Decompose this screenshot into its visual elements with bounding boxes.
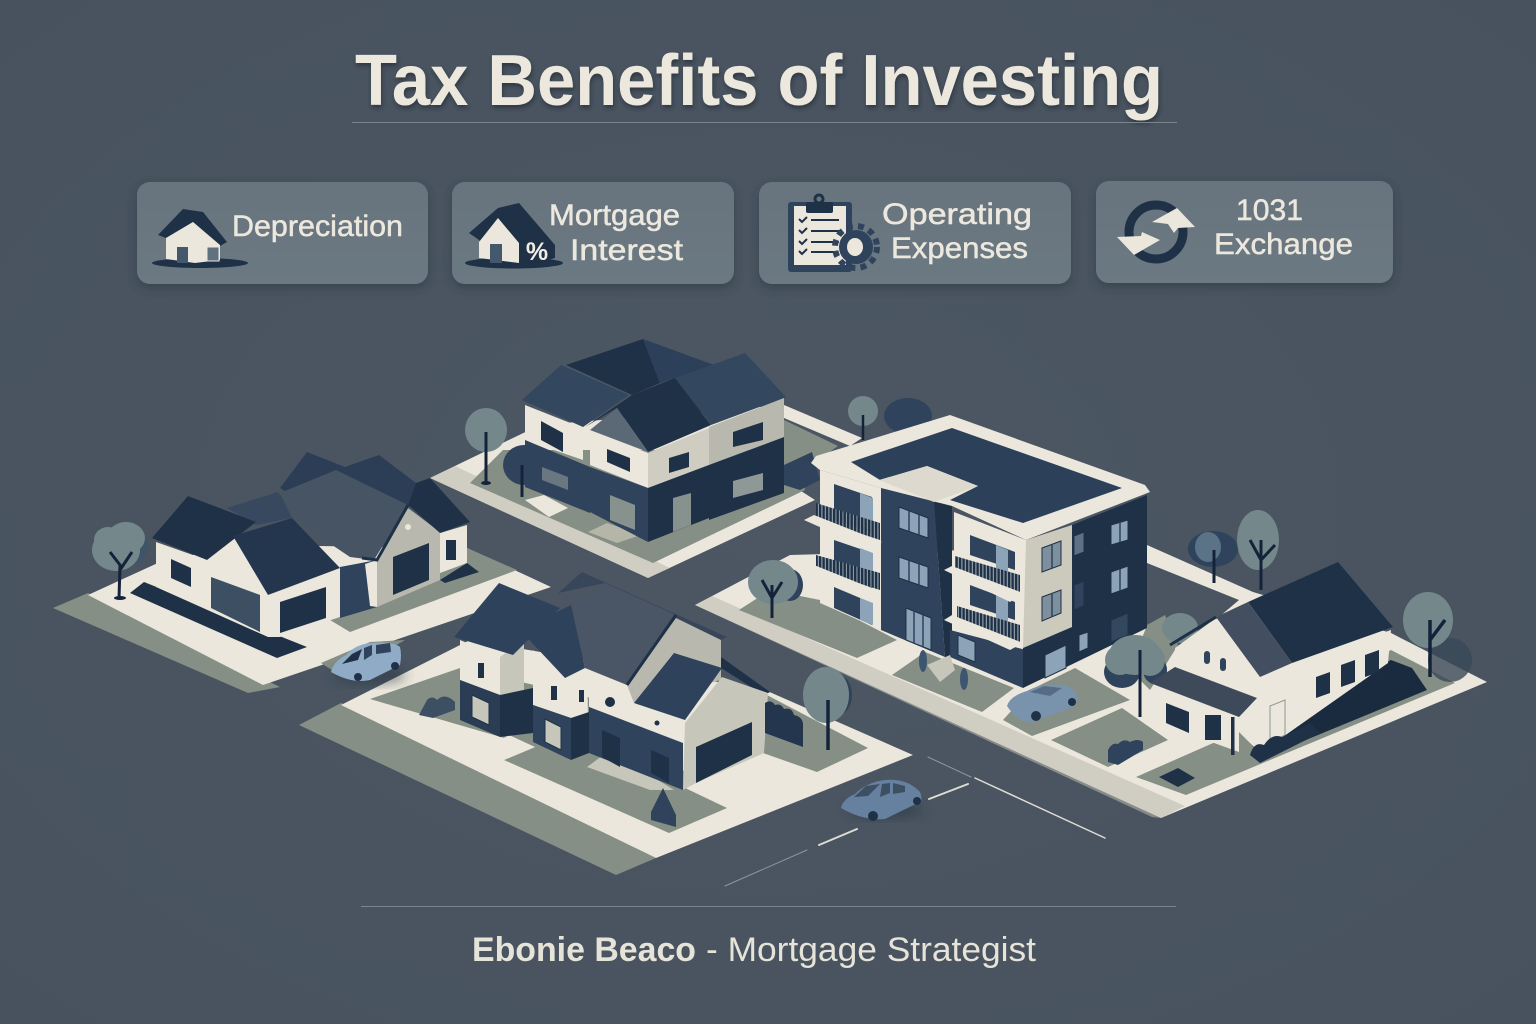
- footer credit: [472, 931, 1037, 969]
- tree: left of apartment: [748, 560, 803, 618]
- entry steps: [927, 655, 955, 682]
- house: left: [152, 452, 479, 637]
- icon: exchange arrows: [1117, 205, 1195, 259]
- roof: porch: [1150, 667, 1257, 717]
- roof: main slope: [1248, 562, 1393, 663]
- wall: garage front: [268, 572, 340, 637]
- label: Operating Expenses: Operating: [882, 198, 1032, 231]
- lot: right with apartment: [695, 545, 1487, 818]
- car: apartment driveway: [1007, 685, 1078, 722]
- house: top middle: [522, 339, 786, 542]
- label: Mortgage Interest: Interest: [570, 234, 684, 267]
- tree: far right: [1403, 592, 1472, 682]
- label: Mortgage Interest: [549, 199, 684, 267]
- windows: [899, 507, 1128, 678]
- tree: left: [92, 522, 148, 600]
- panel: mortgage interest: [452, 182, 734, 284]
- roof: [811, 415, 1150, 540]
- label: Operating Expenses: [882, 198, 1032, 265]
- house: front: [419, 572, 803, 827]
- back roof: [558, 572, 727, 640]
- tree: right pair: [1188, 510, 1279, 590]
- label: Depreciation: Depreciation: [232, 210, 403, 243]
- roof: side slopes: [522, 365, 629, 427]
- tree: top right pair: [848, 396, 932, 440]
- label: 1031 Exchange: [1214, 194, 1353, 261]
- roofs: [454, 583, 560, 655]
- neighbourhood illustration: [53, 339, 1487, 886]
- windows and doors: [472, 695, 489, 725]
- wall: left gable: [156, 536, 268, 637]
- lot: front: [299, 640, 913, 875]
- wall: garage gable: [377, 508, 440, 607]
- car: left: [331, 642, 406, 684]
- panel: operating expenses: [759, 182, 1071, 284]
- shrubs: [1250, 723, 1320, 763]
- tree: behind top house: [465, 408, 545, 497]
- icon: clipboard and gear: [788, 195, 877, 272]
- garage wing: [683, 677, 768, 790]
- lot: top middle: [430, 405, 862, 578]
- label: 1031 Exchange: 1031: [1236, 194, 1303, 227]
- apartment building: [804, 415, 1150, 690]
- panel: depreciation: [137, 182, 428, 284]
- footer credit: Ebonie Beaco: [472, 931, 696, 969]
- panel: 1031 exchange: [1096, 181, 1393, 283]
- car: street: [841, 780, 923, 821]
- road markings: [725, 757, 1105, 886]
- balconies: [804, 503, 1023, 650]
- tree: front lot: [803, 667, 852, 750]
- connector: [340, 560, 377, 618]
- bushes: [419, 696, 455, 718]
- bay windows: [834, 484, 1015, 625]
- label: Mortgage Interest: Mortgage: [549, 199, 680, 232]
- house: right: [1108, 562, 1393, 787]
- lot: left: [53, 545, 551, 693]
- label: Operating Expenses: Expenses: [891, 232, 1028, 265]
- footer credit: - Mortgage Strategist: [706, 931, 1037, 969]
- roof: centre gable: [585, 378, 711, 452]
- roof: back hip: [566, 339, 660, 395]
- title: Tax Benefits of Investing: [355, 41, 1163, 121]
- roof: gable slope: [1216, 602, 1292, 677]
- windows: [1316, 650, 1379, 698]
- icon: house with percent: %: [526, 238, 548, 266]
- windows: [541, 421, 763, 473]
- roof: left gable: [152, 496, 256, 560]
- label: 1031 Exchange: Exchange: [1214, 228, 1353, 261]
- tree: behind right house: [1104, 613, 1198, 717]
- back roofs: [280, 452, 416, 520]
- roof: large gray: [280, 470, 408, 560]
- icon: house: [152, 209, 248, 268]
- icon: house with percent: [465, 203, 563, 268]
- wall: far right wing: [440, 525, 467, 573]
